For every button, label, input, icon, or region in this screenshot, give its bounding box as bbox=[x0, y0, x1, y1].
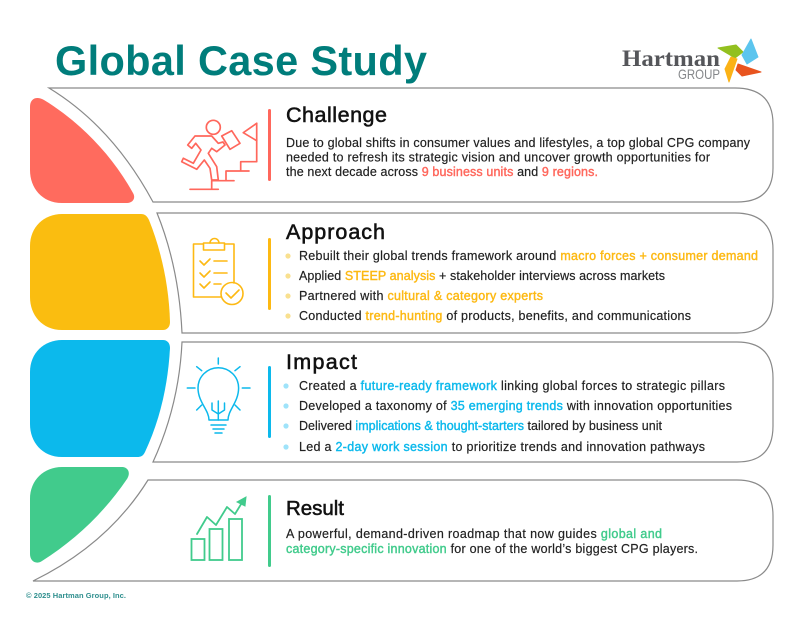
challenge divider bbox=[268, 109, 271, 181]
result text bbox=[286, 527, 698, 556]
impact color blob bbox=[30, 340, 170, 457]
challenge text: the next decade across 9 business units and 9 regions. bbox=[286, 165, 598, 179]
icon: rising bar chart bbox=[192, 497, 246, 560]
approach bullets: Applied STEEP analysis + stakeholder interviews across markets bbox=[299, 269, 665, 283]
result color blob bbox=[30, 467, 129, 563]
result text: A powerful, demand-driven roadmap that now guides global and bbox=[286, 527, 662, 541]
impact bullets: Delivered implications & thought-starters tailored by business unit bbox=[299, 419, 663, 433]
challenge heading: Challenge bbox=[286, 103, 387, 127]
panel: challenge bbox=[30, 88, 773, 203]
impact bullets: Developed a taxonomy of 35 emerging trends with innovation opportunities bbox=[299, 399, 732, 413]
panel: impact bbox=[30, 340, 773, 462]
impact divider bbox=[268, 366, 271, 438]
panel: approach bbox=[30, 213, 773, 333]
approach bullets bbox=[285, 249, 758, 323]
challenge outline bbox=[49, 88, 773, 202]
impact outline bbox=[153, 342, 773, 462]
result text: category-specific innovation for one of the world’s biggest CPG players. bbox=[286, 542, 698, 556]
challenge text: Due to global shifts in consumer values and lifestyles, a top global CPG company bbox=[286, 136, 751, 150]
icon: light bulb bbox=[187, 358, 250, 433]
logo: Hartman Group bbox=[622, 39, 761, 82]
approach color blob bbox=[30, 214, 170, 330]
icon: runner climbing stairs to flag bbox=[182, 120, 257, 189]
impact heading: Impact bbox=[286, 350, 357, 374]
logo: Hartman Group: Hartman bbox=[622, 46, 720, 71]
approach outline bbox=[157, 213, 773, 333]
challenge color blob bbox=[30, 98, 134, 203]
copyright footer: © 2025 Hartman Group, Inc. bbox=[26, 591, 126, 600]
challenge text bbox=[286, 136, 751, 179]
result divider bbox=[268, 495, 271, 567]
approach divider bbox=[268, 238, 271, 310]
approach bullets: Conducted trend-hunting of products, benefits, and communications bbox=[299, 309, 691, 323]
icon: clipboard checklist bbox=[194, 238, 243, 304]
logo: Hartman Group: GROUP bbox=[678, 66, 720, 82]
result heading: Result bbox=[286, 497, 344, 520]
challenge text: needed to refresh its strategic vision and uncover growth opportunities for bbox=[286, 150, 710, 164]
title: Global Case Study bbox=[55, 37, 427, 84]
panel: result bbox=[30, 467, 773, 581]
impact bullets: Created a future-ready framework linking global forces to strategic pillars bbox=[299, 379, 725, 393]
impact bullets bbox=[283, 379, 732, 454]
approach heading: Approach bbox=[286, 220, 385, 244]
result outline bbox=[33, 480, 773, 581]
impact bullets: Led a 2-day work session to prioritize trends and innovation pathways bbox=[299, 440, 705, 454]
approach bullets: Partnered with cultural & category experts bbox=[299, 289, 543, 303]
approach bullets: Rebuilt their global trends framework around macro forces + consumer demand bbox=[299, 249, 758, 263]
